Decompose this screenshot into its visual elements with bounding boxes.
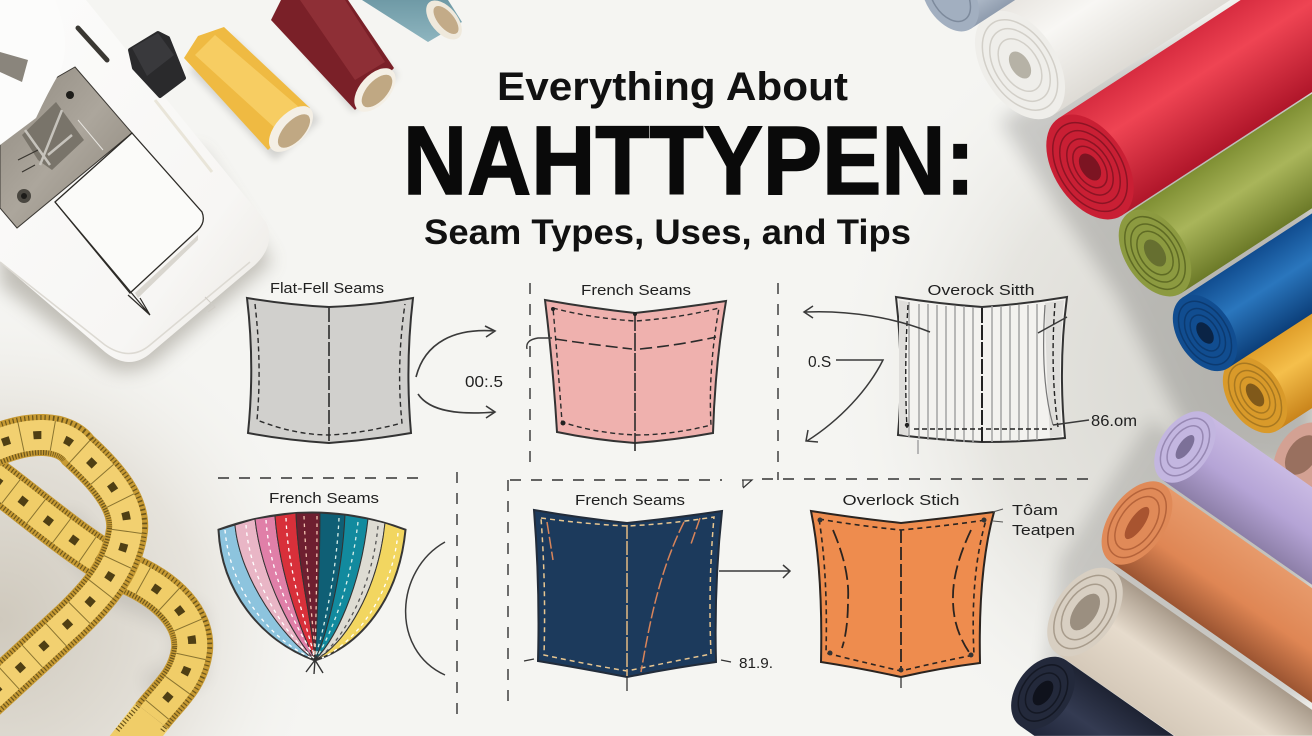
machine knob (130, 33, 184, 96)
fabric roll: gold (1209, 196, 1312, 445)
fabric roll: blue (1159, 134, 1312, 383)
label: overlock stich: Overlock Stich (842, 492, 960, 509)
panel: french seam fan (219, 490, 405, 674)
title (403, 65, 975, 252)
fabric roll: beige (1032, 554, 1312, 736)
title line 1: Everything About (497, 65, 848, 109)
side note: Tôam (1012, 502, 1058, 519)
panel: flat-fell seam (247, 280, 413, 443)
panel: french seam navy (534, 492, 722, 691)
label: french seams fan: French Seams (269, 490, 379, 507)
measuring tape (0, 435, 192, 736)
measurement: 81.9: 81.9. (739, 655, 773, 672)
label: french seams navy: French Seams (575, 492, 685, 509)
panel: overlock stitch orange (811, 492, 994, 688)
side note (1012, 502, 1075, 539)
needle and presser foot (17, 91, 103, 203)
fabric roll: navy (998, 645, 1174, 736)
arc annotation (406, 542, 445, 675)
fabric roll: grey blue (909, 0, 1138, 42)
arrow: navy to orange (719, 565, 790, 578)
arrows: overlock annotations (804, 306, 1089, 442)
tape strand: upper loop (0, 435, 127, 700)
label: flat-fell seams: Flat-Fell Seams (270, 280, 384, 297)
sewing machine (0, 0, 272, 371)
fabric roll: red (1028, 0, 1312, 235)
arrows: flat-fell to french seam (416, 326, 495, 418)
needle plate (0, 67, 132, 228)
slot (78, 28, 107, 60)
measurement: 00:5: 00:.5 (465, 374, 503, 391)
spool: blue grey (362, 0, 469, 46)
fabric roll: orange (1087, 468, 1312, 736)
thread spools (184, 0, 469, 160)
measurement: 0.s: 0.S (808, 354, 831, 371)
spool: dark red (271, 0, 404, 119)
machine arm (0, 0, 65, 118)
fabric roll: white (956, 0, 1312, 135)
spool: yellow (184, 27, 321, 160)
divider dashes (218, 283, 1094, 716)
side note: Teatpen (1012, 522, 1075, 539)
fabric rolls: top right stack (909, 0, 1312, 470)
fabric roll: lavender (1142, 400, 1312, 652)
fabric roll: pink (1262, 412, 1312, 542)
title line 2: NAHTTYPEN: (403, 106, 975, 215)
panel: overlock stitch stripes (896, 282, 1067, 454)
tape tail (110, 703, 168, 736)
label: french seams: French Seams (581, 282, 691, 299)
measurement: 86.om: 86.om (1091, 413, 1137, 430)
tape strand: lower loop (0, 472, 192, 736)
label: overock sitth: Overock Sitth (928, 282, 1034, 299)
fabric roll: olive green (1104, 49, 1312, 310)
machine cover panel (55, 133, 203, 293)
subtitle: Seam Types, Uses, and Tips (424, 213, 911, 252)
fabric rolls: bottom right stack (998, 400, 1312, 736)
panel: french seam pink (527, 282, 726, 453)
